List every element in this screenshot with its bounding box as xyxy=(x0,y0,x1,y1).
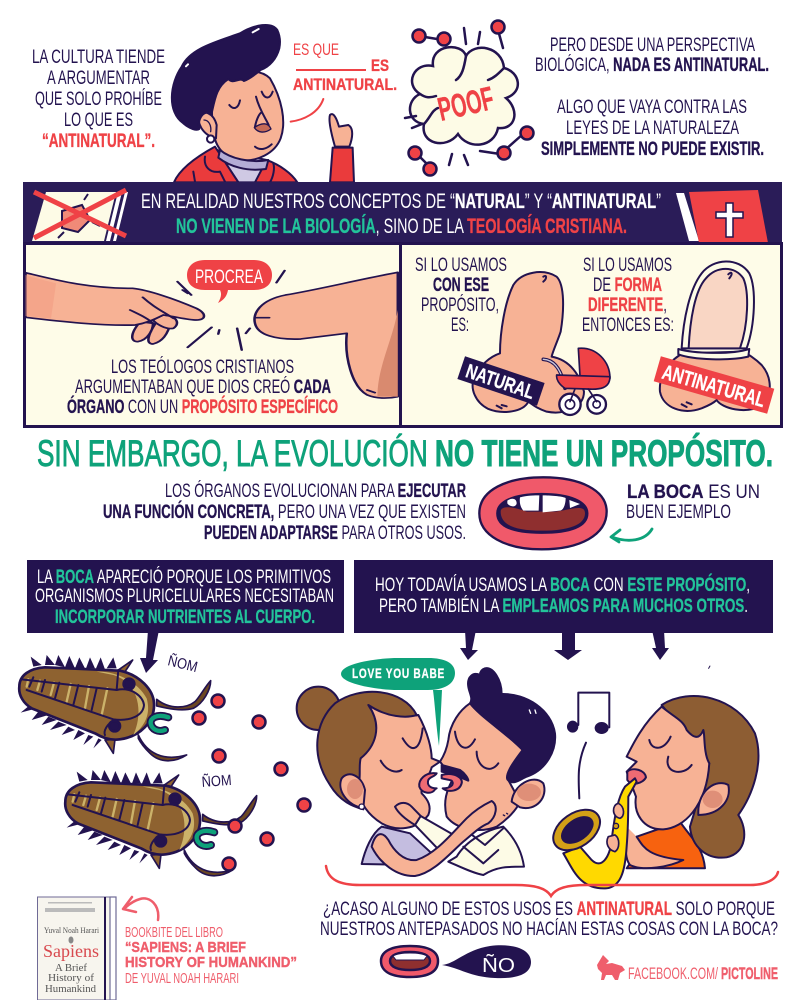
box: mouth today: HOY TODAVÍA USAMOS LA BOCA CON ESTE PROPÓSITO, xyxy=(375,572,750,596)
text: different use: DE FORMA xyxy=(593,274,662,296)
icon: small mouth xyxy=(381,946,438,977)
text: organs evolve: LOS ÓRGANOS EVOLUCIONAN PARA EJECUTAR xyxy=(165,479,466,502)
speech text: ES QUE xyxy=(293,40,339,59)
text: with that purpose: ES: xyxy=(451,314,469,336)
brace xyxy=(326,866,778,896)
icon: crossed biology book xyxy=(32,190,128,241)
saxophone xyxy=(546,778,637,888)
tag: antinatural xyxy=(654,356,774,414)
text: mouth example: LA BOCA ES UN xyxy=(627,481,760,503)
illustration: trilobite two xyxy=(65,770,257,876)
icon: baby stroller xyxy=(543,348,610,415)
man arm with sleeve xyxy=(415,816,457,857)
book cover: Humankind xyxy=(45,984,96,995)
text: bookbite credit: “SAPIENS: A BRIEF xyxy=(125,939,246,956)
poof label: POOF xyxy=(434,79,497,128)
text: different use: SI LO USAMOS xyxy=(583,254,672,276)
illustration: natural use xyxy=(473,272,584,412)
text: theologians xyxy=(67,355,338,418)
book cover xyxy=(38,897,116,1000)
text: culture argues: LO QUE ES xyxy=(64,109,133,131)
illustration: poof cloud with molecules xyxy=(405,20,534,176)
player hands xyxy=(607,803,624,852)
box: mouth today xyxy=(354,560,773,633)
illustration: hand pointing xyxy=(26,273,204,344)
illustration: antinatural use xyxy=(660,261,770,411)
speech text: ES xyxy=(371,56,389,75)
illustration: trilobite one xyxy=(19,655,211,761)
illustration: kissing couple xyxy=(297,668,555,876)
player xyxy=(626,696,758,868)
bubble: ño: ÑO xyxy=(482,953,515,977)
book cover: Yuval Noah Harari xyxy=(44,926,100,935)
text: mouth example xyxy=(626,481,760,523)
red food particles xyxy=(192,694,310,870)
arrow: green to mouth xyxy=(611,529,652,542)
text: culture argues xyxy=(32,46,165,152)
text: closing question xyxy=(320,898,778,940)
text: organs evolve: PUEDEN ADAPTARSE PARA OTROS USOS. xyxy=(204,522,466,544)
text: theologians: ÓRGANO CON UN PROPÓSITO ESPECÍFICO xyxy=(67,394,338,418)
tag: natural: NATURAL xyxy=(463,361,537,404)
text: culture argues: QUE SOLO PROHÍBE xyxy=(35,87,162,110)
speech text: ANTINATURAL. xyxy=(293,75,397,94)
text: theologians: LOS TEÓLOGOS CRISTIANOS xyxy=(111,355,294,378)
text: bookbite credit: DE YUVAL NOAH HARARI xyxy=(125,970,239,987)
bubble: love you babe xyxy=(341,658,455,746)
book cover: Sapiens xyxy=(43,941,99,961)
illustration: saxophone player xyxy=(546,666,758,888)
text: with that purpose: PROPÓSITO, xyxy=(421,293,499,316)
text: different use: ENTONCES ES: xyxy=(582,314,674,336)
speech text xyxy=(293,40,397,94)
woman kissing xyxy=(297,687,440,865)
text: mouth example: BUEN EJEMPLO xyxy=(626,501,731,523)
music note xyxy=(568,666,710,798)
box: mouth origin: INCORPORAR NUTRIENTES AL CUERPO. xyxy=(55,606,315,628)
icon: bible xyxy=(676,190,768,243)
book cover: History of xyxy=(48,973,95,984)
header text xyxy=(141,190,661,238)
icon: pictoline pig xyxy=(597,955,625,980)
text: organs evolve: UNA FUNCIÓN CONCRETA, PERO UNA VEZ QUE EXISTEN xyxy=(103,499,466,523)
text: with that purpose: CON ESE xyxy=(433,274,489,296)
bubble: procrea xyxy=(187,260,272,303)
text: biological perspective xyxy=(535,34,769,160)
text: different use xyxy=(582,254,674,336)
header band xyxy=(23,182,782,244)
book cover: A Brief xyxy=(55,963,88,974)
panel: right usage xyxy=(400,244,782,426)
text: bookbite credit: BOOKBITE DEL LIBRO xyxy=(125,924,223,941)
bubble: procrea: PROCREA xyxy=(195,267,263,288)
icon: mouth xyxy=(479,477,607,549)
text: bookbite credit xyxy=(125,924,297,987)
box: mouth origin xyxy=(27,560,344,633)
panel: left theologians xyxy=(24,244,400,426)
woman arm xyxy=(372,801,496,876)
text: with that purpose xyxy=(415,254,507,336)
illustration: woman speaking xyxy=(172,25,354,182)
text: culture argues: “ANTINATURAL”. xyxy=(42,130,155,152)
text: organs evolve xyxy=(103,479,466,544)
text: with that purpose: SI LO USAMOS xyxy=(415,254,507,276)
text: culture argues: LA CULTURA TIENDE xyxy=(32,46,165,68)
man kissing xyxy=(440,668,555,875)
box: mouth origin: ORGANISMOS PLURICELULARES NECESITABAN xyxy=(35,585,334,607)
bubble: love you babe: LOVE YOU BABE xyxy=(352,665,445,681)
text: culture argues: A ARGUMENTAR xyxy=(47,67,150,89)
tag: natural xyxy=(457,356,545,406)
illustration: organ receiving command xyxy=(177,271,398,398)
labels: ñom: ÑOM xyxy=(166,652,199,676)
labels: ñom xyxy=(166,652,232,791)
box: mouth origin: LA BOCA APARECIÓ PORQUE LOS PRIMITIVOS xyxy=(37,565,331,588)
arrow: to book xyxy=(123,897,158,920)
text: theologians: ARGUMENTABAN QUE DIOS CREÓ CADA xyxy=(75,375,331,398)
text: bookbite credit: HISTORY OF HUMANKIND” xyxy=(125,954,297,971)
header text: NO VIENEN DE LA BIOLOGÍA, SINO DE LA TEOLOGÍA CRISTIANA. xyxy=(176,215,627,238)
labels: ñom: ÑOM xyxy=(201,772,232,791)
arrows down xyxy=(140,630,669,673)
bubble: ño xyxy=(442,945,531,978)
text: different use: DIFERENTE, xyxy=(588,294,667,316)
header text: EN REALIDAD NUESTROS CONCEPTOS DE “NATURAL” Y “ANTINATURAL” xyxy=(141,190,661,213)
